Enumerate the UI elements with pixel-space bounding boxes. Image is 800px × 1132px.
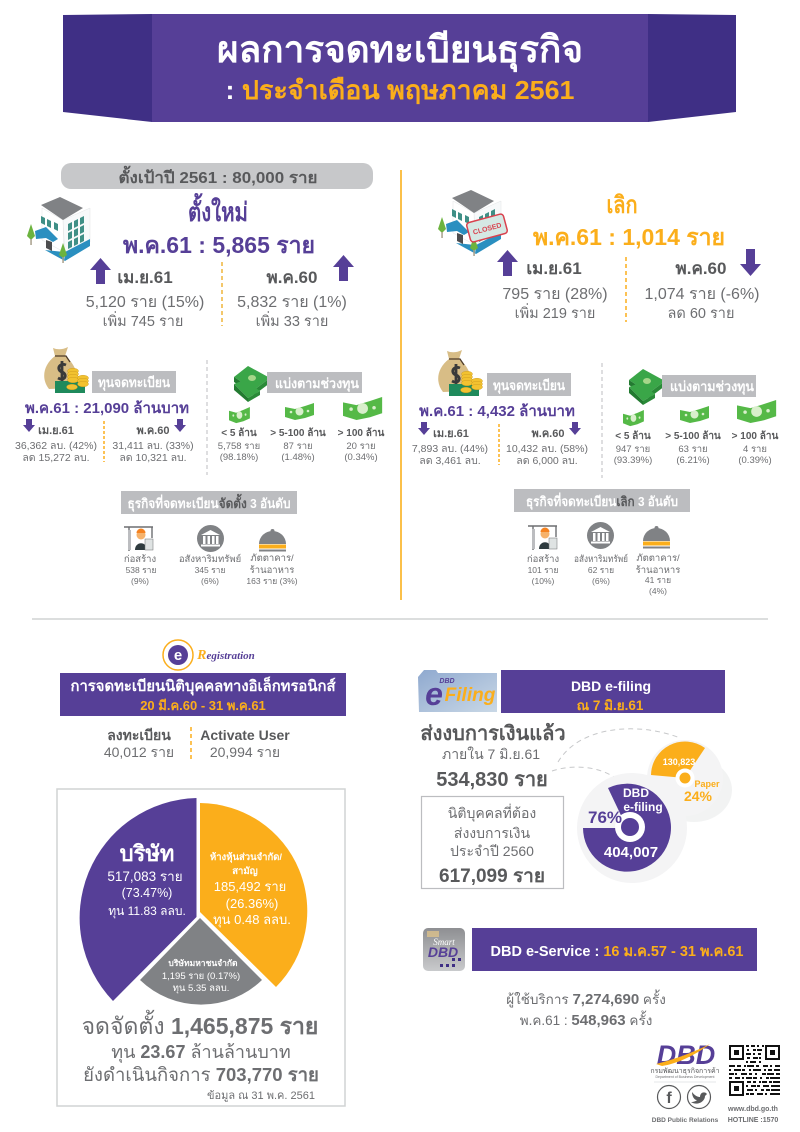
icon: e-Registration logo [163, 640, 255, 670]
closed heading: พ.ค.61 : 1,014 ราย [533, 224, 725, 250]
icon: twitter [688, 1086, 710, 1108]
e-filing banner: ณ 7 มิ.ย.61 [577, 698, 644, 713]
range under 5M: (98.18%) [220, 452, 258, 463]
range over 100M: (0.39%) [738, 455, 772, 466]
closed heading [533, 192, 725, 250]
totals: ข้อมูล ณ 31 พ.ค. 2561 [207, 1090, 315, 1102]
top 3: restaurant: 41 ราย [645, 575, 671, 585]
target pill: ตั้งเป้าปี 2561 : 80,000 ราย [118, 165, 318, 187]
capital range label: แบ่งตามช่วงทุน [275, 376, 360, 392]
e-registration banner: การจดทะเบียนนิติบุคคลทางอิเล็กทรอนิกส์ [70, 676, 336, 696]
registered count: 40,012 ราย [104, 744, 174, 760]
QR code [729, 1046, 780, 1095]
pie slice: partnership: สามัญ [232, 866, 258, 877]
icon: money bag [44, 347, 88, 393]
comparison April: 5,120 ราย (15%) [86, 294, 204, 311]
page credit: DBD Public Relations [652, 1117, 719, 1124]
website and hotline: HOTLINE :1570 [728, 1117, 778, 1124]
capital May [506, 428, 588, 467]
icon: money stack [629, 369, 665, 405]
pie slice: partnership: ห้างหุ้นส่วนจำกัด/ [210, 851, 282, 863]
closed heading: เลิก [606, 192, 638, 219]
range over 100M: 4 ราย [743, 444, 767, 455]
comparison April [502, 259, 608, 322]
range 5-100M: (1.48%) [281, 452, 315, 463]
filed text: ภายใน 7 มิ.ย.61 [442, 746, 540, 762]
new heading: พ.ค.61 : 5,865 ราย [123, 232, 315, 258]
range over 100M [732, 400, 778, 466]
capital label: ทุนจดทะเบียน [493, 378, 566, 394]
range under 5M: (93.39%) [614, 455, 652, 466]
icon: Smart DBD app [423, 928, 465, 971]
title banner [63, 14, 736, 122]
totals: จดจัดตั้ง 1,465,875 ราย [82, 1010, 318, 1039]
required filers box: นิติบุคคลที่ต้อง [448, 804, 536, 822]
pie slice: public company [140, 918, 262, 1005]
pie slice: partnership [200, 803, 307, 987]
required filers box: ประจำปี 2560 [450, 843, 534, 859]
donut: paper: Paper [694, 779, 720, 789]
comparison May: เพิ่ม 33 ราย [256, 311, 328, 330]
pie slice: partnership: ทุน 0.48 ลลบ. [213, 912, 291, 928]
active user count [200, 727, 290, 760]
e-registration banner [60, 673, 346, 716]
range over 100M: 20 ราย [346, 441, 376, 452]
capital label [487, 373, 571, 396]
icon: closed building: CLOSED [472, 222, 502, 237]
pie slice: public company: บริษัทมหาชนจำกัด [168, 958, 238, 968]
range under 5M: 947 ราย [616, 444, 650, 455]
capital range label [662, 375, 756, 397]
capital April [15, 425, 97, 464]
new heading [123, 192, 315, 258]
pie slice: company: ทุน 11.83 ลลบ. [108, 904, 186, 919]
top 3 banner: ธุรกิจที่จดทะเบียนเลิก 3 อันดับ [526, 492, 678, 510]
capital April [412, 428, 488, 467]
dashed connectors [552, 729, 680, 777]
top 3: restaurant: ภัตตาคาร/ [250, 553, 294, 564]
e-filing banner: DBD e-filing [571, 678, 651, 694]
comparison April: เพิ่ม 745 ราย [103, 311, 183, 330]
pie slice: company: (73.47%) [122, 886, 172, 900]
capital May: ลด 10,321 ลบ. [119, 452, 187, 464]
icon: closed building [438, 190, 508, 256]
website and hotline [727, 1106, 778, 1124]
comparison May: พ.ค.60 [267, 268, 317, 287]
filed text [420, 722, 566, 791]
range under 5M: 5,758 ราย [218, 441, 260, 452]
e-filing banner [501, 670, 725, 713]
capital April: เม.ย.61 [38, 425, 74, 437]
capital label [92, 371, 176, 393]
capital May: ลด 6,000 ลบ. [516, 455, 578, 467]
capital label: ทุนจดทะเบียน [98, 375, 171, 391]
icon: e-Registration logo: Registration [196, 648, 255, 663]
range 5-100M [270, 403, 326, 463]
range over 100M: > 100 ล้าน [732, 430, 778, 442]
top 3: real estate: 345 ราย [195, 565, 225, 575]
DBD logo: DBD [657, 1040, 715, 1070]
arrow down [569, 422, 581, 435]
required filers box: 617,099 ราย [439, 866, 545, 887]
title banner: ผลการจดทะเบียนธุรกิจ [217, 29, 583, 73]
panel: new registrations [15, 163, 384, 586]
comparison May [644, 259, 760, 322]
active user count: 20,994 ราย [210, 744, 280, 760]
capital April: ลด 15,272 ลบ. [22, 452, 90, 464]
top 3: construction: 101 ราย [528, 565, 558, 575]
top 3: restaurant: 163 ราย (3%) [246, 576, 298, 586]
top 3: restaurant: ภัตตาคาร/ [636, 553, 680, 564]
comparison April [86, 268, 204, 330]
range under 5M [218, 407, 260, 463]
arrow up [90, 258, 111, 284]
registered count [104, 727, 174, 760]
e-service banner [472, 928, 757, 971]
donut: e-filing: 404,007 [604, 844, 658, 861]
range 5-100M: (6.21%) [676, 455, 710, 466]
pie slice: company [80, 798, 196, 1001]
top 3 banner: ธุรกิจที่จดทะเบียนจัดตั้ง 3 อันดับ [128, 493, 290, 512]
arrow up [333, 255, 354, 281]
comparison April: เม.ย.61 [117, 268, 173, 287]
top 3: real estate: อสังหาริมทรัพย์ [179, 553, 241, 565]
range under 5M: < 5 ล้าน [615, 430, 651, 442]
capital May: 10,432 ลบ. (58%) [506, 443, 588, 455]
top 3: restaurant: ร้านอาหาร [636, 565, 680, 576]
registered count: ลงทะเบียน [107, 727, 171, 743]
top 3: real estate [179, 525, 241, 586]
top 3 banner [514, 489, 690, 512]
comparison April: 795 ราย (28%) [502, 286, 608, 303]
required filers box [422, 796, 564, 888]
capital range label: แบ่งตามช่วงทุน [670, 379, 755, 395]
e-service stats [506, 989, 666, 1029]
pie slice: public company: 1,195 ราย (0.17%) [162, 971, 240, 982]
top 3: construction: ก่อสร้าง [527, 554, 559, 565]
top 3: restaurant [246, 529, 298, 586]
pie slice: company: 517,083 ราย [107, 869, 183, 884]
icon: Smart DBD app: DBD [428, 944, 458, 960]
pie slice: public company: ทุน 5.35 ลลบ. [173, 983, 229, 994]
capital April: 7,893 ลบ. (44%) [412, 443, 488, 455]
icon: e-filing logo: DBD [439, 678, 455, 685]
top 3 banner [121, 491, 297, 514]
top 3: real estate: (6%) [201, 576, 219, 586]
e-service stats: พ.ค.61 : 548,963 ครั้ง [520, 1010, 652, 1029]
icon: e-filing logo: e [425, 676, 443, 712]
comparison April: เพิ่ม 219 ราย [515, 303, 595, 322]
donut: e-filing [577, 773, 687, 883]
range 5-100M: > 5-100 ล้าน [270, 427, 326, 439]
pie slice: partnership: 185,492 ราย [214, 879, 286, 894]
top 3: construction [527, 526, 559, 586]
top 3: restaurant [636, 526, 680, 596]
capital May: พ.ค.60 [532, 428, 564, 440]
icon: facebook: f [666, 1090, 672, 1107]
donut: e-filing: e-filing [623, 800, 663, 814]
capital May: พ.ค.60 [137, 425, 169, 437]
capital range label [267, 372, 362, 393]
top 3: construction: ก่อสร้าง [124, 554, 156, 565]
top 3: construction: (9%) [131, 576, 149, 586]
comparison May: 1,074 ราย (-6%) [644, 286, 760, 303]
filed text: ส่งงบการเงินแล้ว [420, 722, 566, 745]
top 3: restaurant: ร้านอาหาร [250, 565, 294, 576]
icon: building [27, 197, 90, 263]
arrow down [174, 419, 186, 432]
top 3: restaurant: (4%) [649, 586, 667, 596]
capital April: 36,362 ลบ. (42%) [15, 440, 97, 452]
new heading: ตั้งใหม่ [188, 192, 248, 227]
arrow down [740, 249, 761, 276]
icon: e-Registration logo: e [174, 647, 182, 664]
e-registration banner: 20 มี.ค.60 - 31 พ.ค.61 [140, 698, 266, 713]
comparison May [237, 268, 347, 330]
range under 5M [614, 410, 652, 466]
donut: paper: 130,823 [663, 757, 695, 767]
range 5-100M: 63 ราย [678, 444, 708, 455]
active user count: Activate User [200, 727, 290, 743]
pie slice: company: บริษัท [120, 841, 174, 866]
capital April: ลด 3,461 ลบ. [419, 455, 481, 467]
website and hotline: www.dbd.go.th [727, 1106, 778, 1113]
range 5-100M: > 5-100 ล้าน [665, 430, 721, 442]
comparison May: พ.ค.60 [676, 259, 726, 278]
arrow down [418, 422, 430, 435]
required filers box: ส่งงบการเงิน [454, 825, 531, 841]
arrow down [23, 419, 35, 432]
donut: e-filing: DBD [623, 786, 649, 800]
comparison April: เม.ย.61 [526, 259, 582, 278]
top 3: construction: 538 ราย [126, 565, 156, 575]
e-service banner: DBD e-Service : 16 ม.ค.57 - 31 พ.ค.61 [491, 944, 743, 960]
top 3: real estate: อสังหาริมทรัพย์ [574, 553, 628, 565]
target pill [61, 163, 373, 189]
capital May [112, 425, 194, 464]
filed text: 534,830 ราย [436, 769, 548, 791]
DBD logo: กรมพัฒนาธุรกิจการค้า [650, 1067, 720, 1075]
arrow up [497, 250, 518, 276]
top 3: real estate [574, 522, 628, 586]
icon: money stack [234, 366, 270, 402]
top 3: real estate: (6%) [592, 576, 610, 586]
icon: facebook [658, 1086, 680, 1108]
panel: closures [412, 190, 778, 596]
range under 5M: < 5 ล้าน [221, 427, 257, 439]
donut: e-filing: 76% [588, 808, 622, 827]
comparison May: ลด 60 ราย [668, 306, 734, 322]
donut: paper [647, 740, 732, 822]
range over 100M [338, 397, 384, 463]
capital May: 31,411 ลบ. (33%) [112, 440, 194, 452]
donut: paper: 24% [684, 788, 713, 804]
e-service stats: ผู้ใช้บริการ 7,274,690 ครั้ง [506, 989, 666, 1008]
capital total: พ.ค.61 : 21,090 ล้านบาท [25, 400, 189, 417]
capital total: พ.ค.61 : 4,432 ล้านบาท [419, 403, 575, 420]
top 3: construction: (10%) [532, 576, 554, 586]
totals [82, 1010, 319, 1102]
range over 100M: (0.34%) [344, 452, 378, 463]
range 5-100M: 87 ราย [283, 441, 313, 452]
icon: Smart DBD app: Smart [433, 937, 455, 947]
range 5-100M [665, 406, 721, 466]
title banner: : ประจำเดือน พฤษภาคม 2561 [226, 75, 574, 105]
comparison May: 5,832 ราย (1%) [237, 294, 347, 311]
panel: entity type pie [57, 789, 345, 1106]
DBD logo [650, 1040, 720, 1079]
totals: ยังดำเนินกิจการ 703,770 ราย [83, 1064, 319, 1085]
capital April: เม.ย.61 [433, 428, 469, 440]
range over 100M: > 100 ล้าน [338, 427, 384, 439]
top 3: construction [124, 527, 156, 586]
totals: ทุน 23.67 ล้านล้านบาท [111, 1042, 291, 1063]
pie slice: partnership: (26.36%) [226, 896, 278, 911]
DBD logo: Department of Business Development [656, 1075, 714, 1079]
icon: e-filing logo [418, 670, 497, 712]
icon: e-filing logo: Filing [445, 685, 496, 706]
top 3: real estate: 62 ราย [588, 565, 614, 575]
icon: money bag [438, 350, 482, 396]
